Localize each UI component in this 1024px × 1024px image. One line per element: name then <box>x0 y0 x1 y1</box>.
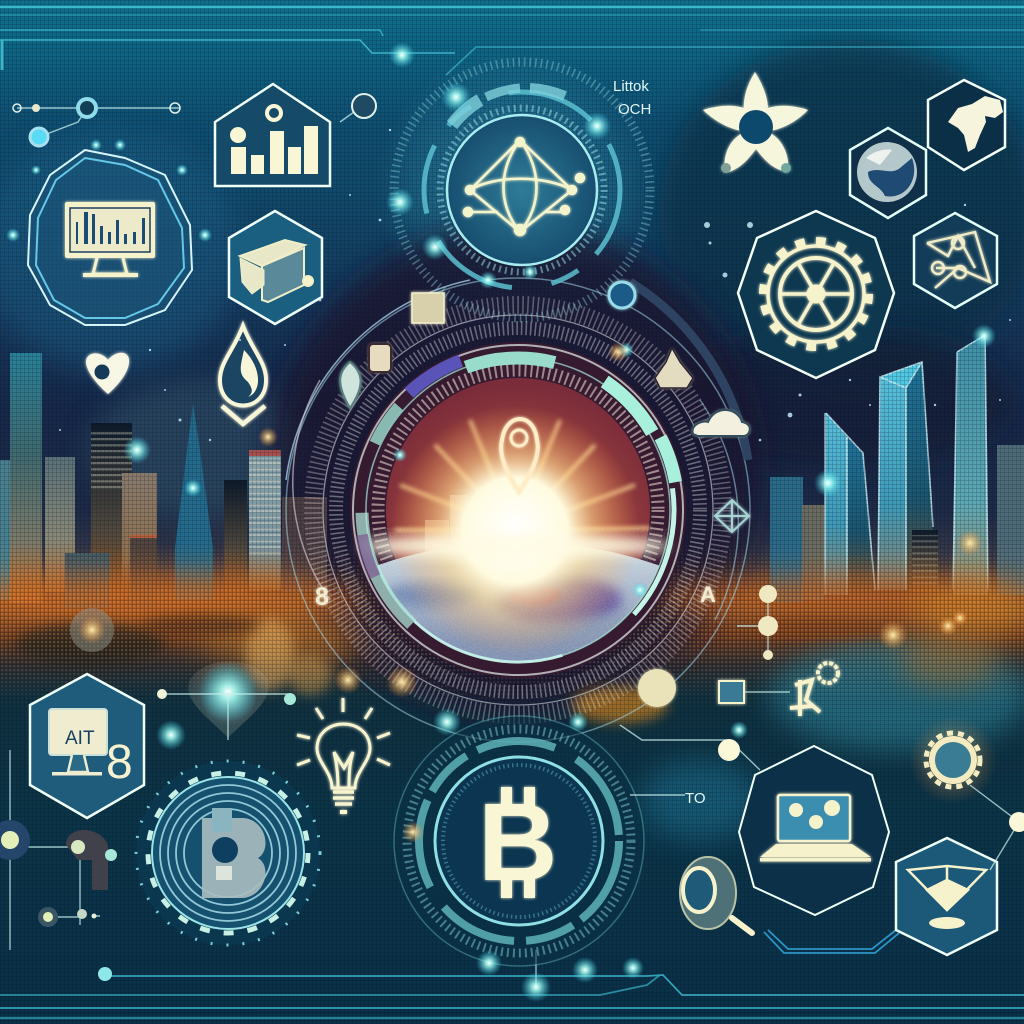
icon: ring <box>267 106 281 120</box>
icon: cogs <box>790 663 838 716</box>
panel: world hexagon <box>928 80 1005 170</box>
icon: gem <box>908 866 986 910</box>
small lower-right icons <box>638 663 838 716</box>
icon: AI monitor <box>49 709 107 776</box>
icon: light bulb <box>297 698 390 812</box>
label: Littok OCH <box>613 78 651 118</box>
earth horizon <box>368 528 668 662</box>
panel: globe hexagon <box>850 128 926 218</box>
label: 8: 8 <box>106 736 133 789</box>
icon: gear wheel <box>763 241 869 347</box>
icon: heart <box>86 353 129 394</box>
icon: small shield <box>609 282 635 308</box>
background haze <box>0 40 1024 840</box>
icon: document <box>412 293 444 323</box>
panel: monitor octagon <box>28 150 192 325</box>
panel: gem hexagon <box>896 838 997 955</box>
panel: gear octagon <box>738 211 894 378</box>
skyline right <box>770 335 1024 602</box>
top circuit lines <box>0 7 1024 75</box>
panel: box hexagon <box>229 211 322 324</box>
stars <box>59 129 1011 441</box>
arc blocks <box>452 88 565 125</box>
icon: small 8: 8 <box>315 583 329 611</box>
dial segments <box>292 284 744 736</box>
label: Littok OCH: Littok <box>613 78 649 95</box>
icon: flower <box>703 72 808 173</box>
icon: world map <box>948 96 1003 152</box>
label: Littok OCH: OCH <box>618 101 651 118</box>
icon: water drop <box>220 326 266 424</box>
panel: top network circle <box>394 62 650 318</box>
icon: faded bitcoin <box>202 818 266 898</box>
icon: network diamond <box>464 138 584 235</box>
orange city lights band <box>0 540 1024 723</box>
label: AIT: AIT <box>65 728 95 749</box>
icon: bitcoin symbol: B <box>478 781 557 904</box>
icon: cloud <box>693 410 750 436</box>
icon: patterned ball <box>638 669 676 707</box>
icon: tile <box>719 681 744 703</box>
icon: monitor <box>65 202 155 277</box>
central dial background rings <box>286 278 750 742</box>
icon: lock <box>369 344 391 372</box>
icon: node network <box>927 232 990 288</box>
icon: magnifier <box>680 857 752 933</box>
panel: laptop octagon <box>739 746 889 915</box>
panel: coin circle left <box>136 761 320 945</box>
dark disc behind the dial <box>270 225 760 715</box>
panel: AI hexagon <box>30 674 144 818</box>
icon: box <box>240 240 313 302</box>
city silhouette in dial <box>425 495 466 552</box>
icon: gear glow <box>909 716 997 804</box>
ring icons <box>315 282 750 611</box>
bottom circuit lines <box>0 930 1024 1018</box>
skyline left <box>0 353 327 608</box>
sun rays <box>395 420 650 530</box>
icon: location pin <box>501 419 538 492</box>
icon: oval <box>929 917 965 929</box>
icon: target <box>715 500 749 532</box>
panel: network hexagon <box>914 213 997 308</box>
icon: leaf shield <box>340 362 361 408</box>
bar chart <box>230 126 318 174</box>
label: TO: TO <box>685 790 706 807</box>
icon: spiky mask <box>655 348 693 388</box>
panel: bar chart house <box>215 84 330 186</box>
panel: central sunrise dial <box>350 342 686 678</box>
panel: bitcoin circle <box>394 716 644 966</box>
icon: small A: A <box>700 582 716 607</box>
icon: laptop <box>760 795 871 862</box>
icon: globe <box>857 142 917 202</box>
panel: star dome <box>188 661 269 738</box>
